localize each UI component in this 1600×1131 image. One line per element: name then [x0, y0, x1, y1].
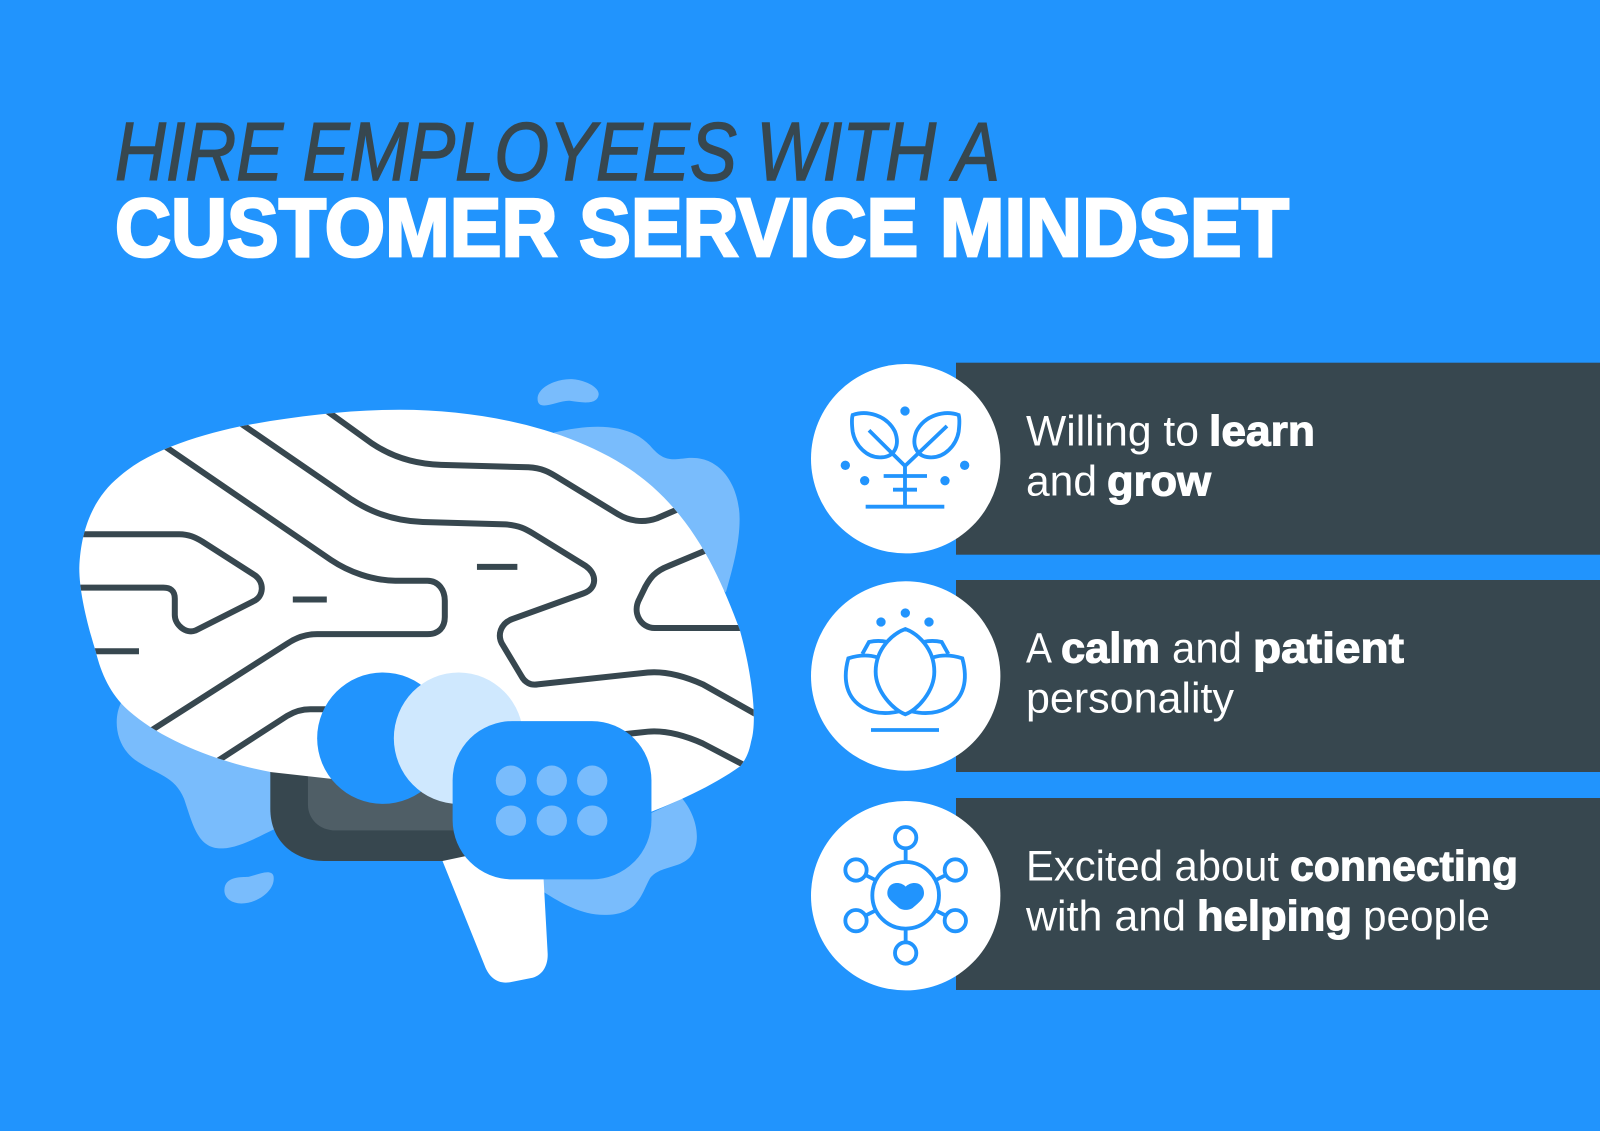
bar 2: [956, 580, 1600, 772]
blob: top small: [538, 379, 599, 405]
text 3: helping: [1197, 892, 1352, 940]
brain base dark: [270, 768, 473, 861]
icon: lotus: [846, 608, 965, 730]
title: HIRE EMPLOYEES WITH A: [115, 105, 1000, 198]
icon: plant: [841, 406, 969, 507]
speech bubble with dots: [453, 721, 651, 879]
bar 3: [956, 798, 1600, 990]
infographic canvas: [79, 122, 1600, 990]
brain stem: [443, 850, 548, 983]
text 2: patient: [1253, 624, 1404, 672]
brain body: [79, 410, 754, 815]
text 1: grow: [1107, 458, 1212, 506]
text 3: people: [1363, 892, 1490, 940]
text 1: and: [1026, 458, 1097, 506]
brain base grey: [308, 768, 464, 830]
circle 2: [811, 581, 1000, 771]
pale circle: [394, 673, 523, 804]
panel: calm and patient: [811, 580, 1600, 772]
brain illustration: [76, 379, 758, 983]
panel: connecting and helping: [811, 798, 1600, 990]
blob: upper right: [554, 427, 740, 593]
text 2: personality: [1026, 674, 1234, 722]
text 2: and: [1172, 624, 1242, 672]
panel: learn and grow: [811, 363, 1600, 555]
text 3: with and: [1025, 892, 1186, 940]
blob: lower left: [117, 703, 336, 848]
title: [115, 105, 1289, 274]
circle 3: [811, 801, 1000, 990]
circle 1: [811, 364, 1000, 553]
text 3: connecting: [1290, 842, 1518, 890]
blob: lower right: [519, 799, 697, 915]
bar 1: [956, 363, 1600, 555]
text 3: [1025, 842, 1518, 940]
blue circle: [317, 673, 448, 804]
text 1: learn: [1209, 408, 1315, 456]
text 1: [1026, 408, 1315, 506]
title: CUSTOMER SERVICE MINDSET: [115, 181, 1289, 274]
text 1: Willing to: [1026, 408, 1199, 456]
blob: small lower left: [224, 872, 274, 903]
brain folds: [76, 411, 758, 766]
text 2: [1026, 624, 1404, 722]
text 2: A: [1026, 624, 1052, 672]
icon: network heart: [845, 827, 966, 964]
text 2: calm: [1061, 624, 1160, 672]
text 3: Excited about: [1026, 842, 1279, 890]
